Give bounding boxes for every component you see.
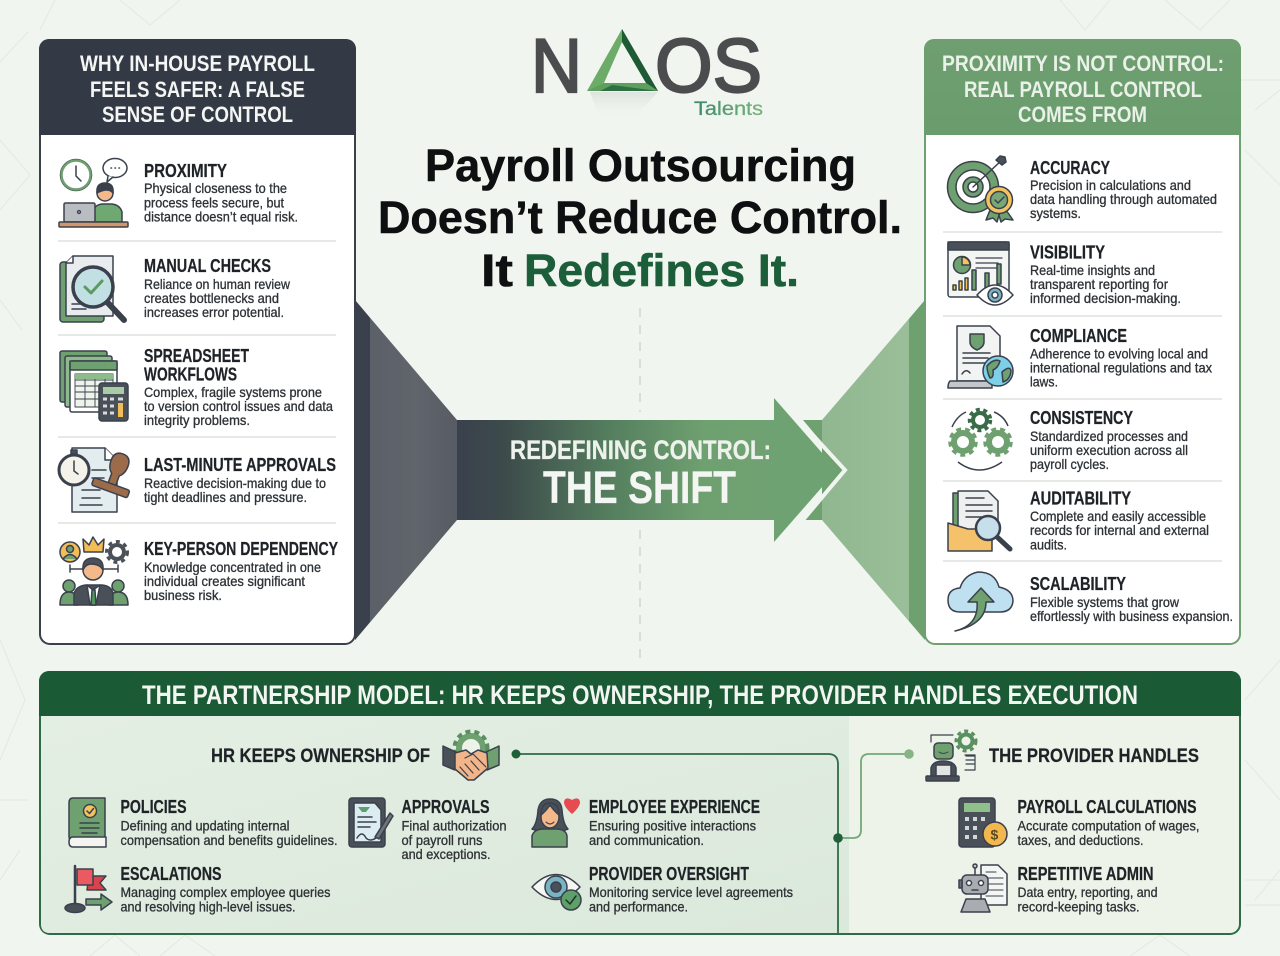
icon: logo triangle (587, 29, 658, 91)
text: proximity description (144, 180, 298, 224)
text: payroll calculations description: taxes, and deductions. (1018, 832, 1144, 848)
panel header: COMES FROM (1018, 102, 1147, 127)
title: It (481, 245, 513, 296)
text: approvals description: tight deadlines and pressure. (144, 489, 307, 505)
arrow label: REDEFINING CONTROL: (510, 435, 771, 465)
item: accuracy: ACCURACY (1030, 158, 1110, 178)
panel header: WHY IN-HOUSE PAYROLL (80, 51, 315, 76)
text: employee experience description: Ensuring positive interactions (589, 818, 756, 834)
panel: real payroll control (924, 39, 1241, 644)
text: policies description: compensation and benefits guidelines. (120, 832, 338, 848)
panel header: PROXIMITY IS NOT CONTROL: (942, 51, 1224, 76)
text: provider oversight description: Monitoring service level agreements (589, 884, 793, 900)
text: provider oversight description: and performance. (589, 898, 688, 914)
section: the provider handles: THE PROVIDER HANDLES (989, 745, 1199, 767)
text: spreadsheet description (144, 384, 333, 428)
icon: key person (60, 537, 128, 605)
heading: spreadsheet workflows (144, 346, 249, 384)
text: approvals description: of payroll runs (402, 832, 482, 848)
icon: target and badge (948, 156, 1013, 222)
panel header (39, 39, 356, 135)
text: spreadsheet description: Complex, fragile systems prone (144, 384, 322, 400)
item: auditability (948, 488, 1209, 552)
item: auditability: AUDITABILITY (1030, 488, 1131, 508)
icon: robot and document (959, 864, 1007, 912)
heading: spreadsheet workflows: WORKFLOWS (144, 364, 237, 384)
icon: magnifier over document (60, 256, 124, 322)
text: spreadsheet description: integrity problems. (144, 412, 250, 428)
text: accuracy description (1030, 177, 1217, 221)
item: accuracy (948, 156, 1217, 222)
item: scalability: SCALABILITY (1030, 574, 1126, 594)
icon: dashboard and eye (948, 242, 1013, 305)
text: compliance description: international regulations and tax (1030, 360, 1212, 376)
text: policies description: Defining and updating internal (120, 818, 290, 834)
icon: stopwatch, document and stamp (59, 447, 141, 512)
text: manual checks description: creates bottlenecks and (144, 290, 279, 306)
icon: three gears (950, 410, 1011, 470)
text: approvals description (402, 818, 506, 862)
heading: spreadsheet workflows: SPREADSHEET (144, 346, 249, 366)
icon: smiling employee with heart (532, 798, 580, 847)
text: manual checks description (144, 276, 291, 320)
text: auditability description: audits. (1030, 536, 1067, 552)
text: repetitive admin description (1018, 884, 1158, 914)
item: compliance: COMPLIANCE (1030, 326, 1127, 346)
text: escalations description: Managing complex employee queries (120, 884, 330, 900)
text: auditability description: Complete and easily accessible (1030, 508, 1206, 524)
text: key-person description: individual creates significant (144, 573, 305, 589)
item: escalations: ESCALATIONS (120, 864, 222, 884)
item: payroll calculations (959, 797, 1200, 848)
section: HR keeps ownership: HR KEEPS OWNERSHIP OF (211, 745, 430, 767)
text: accuracy description: Precision in calculations and (1030, 177, 1191, 193)
arrow label (510, 435, 771, 513)
right funnel (803, 300, 925, 640)
title: Redefines It. (524, 245, 799, 296)
icon: cloud and growth arrow (948, 572, 1013, 631)
icon: robot and gear (926, 731, 976, 781)
item: payroll calculations: PAYROLL CALCULATIONS (1018, 797, 1196, 817)
item: compliance (948, 326, 1212, 390)
item: policies (69, 797, 338, 848)
connector lines (512, 749, 914, 934)
item: consistency (950, 408, 1188, 472)
text: provider oversight description (589, 884, 793, 914)
item: policies: POLICIES (120, 797, 186, 817)
text: manual checks description: increases error potential. (144, 304, 284, 320)
item: last-minute approvals: LAST-MINUTE APPROVALS (144, 455, 336, 475)
item: manual checks (60, 256, 291, 322)
item: visibility (948, 242, 1181, 306)
item: repetitive admin: REPETITIVE ADMIN (1018, 864, 1154, 884)
title: Payroll Outsourcing (425, 140, 856, 191)
panel header: SENSE OF CONTROL (102, 102, 293, 127)
text: consistency description: uniform execution across all (1030, 442, 1188, 458)
item: employee experience (532, 797, 760, 848)
text: key-person description (144, 559, 321, 603)
text: consistency description: payroll cycles. (1030, 456, 1109, 472)
left funnel (355, 300, 457, 640)
title: Doesn’t Reduce Control. (378, 192, 902, 243)
item: escalations (65, 864, 330, 914)
dashed centre line (639, 308, 641, 660)
item: proximity: PROXIMITY (144, 161, 227, 181)
text: consistency description: Standardized processes and (1030, 428, 1188, 444)
item: approvals (349, 797, 506, 862)
text: repetitive admin description: Data entry, reporting, and (1018, 884, 1158, 900)
text: approvals description: Final authorization (402, 818, 506, 834)
chevron highlight (799, 420, 845, 520)
icon: handshake and gear (443, 732, 499, 780)
item: approvals: APPROVALS (402, 797, 490, 817)
item: repetitive admin (959, 864, 1158, 914)
icon: flag and arrow (65, 866, 112, 912)
text: employee experience description: and communication. (589, 832, 704, 848)
icon: calculator and coin (959, 798, 1007, 847)
text: compliance description (1030, 346, 1212, 390)
icon: document, shield and globe (948, 326, 1013, 388)
title (378, 140, 902, 296)
text: visibility description (1030, 262, 1181, 306)
text: accuracy description: data handling through automated (1030, 191, 1217, 207)
arrow label: THE SHIFT (543, 462, 736, 513)
text: auditability description: records for internal and external (1030, 522, 1209, 538)
text: escalations description: and resolving high-level issues. (120, 898, 296, 914)
item: employee experience: EMPLOYEE EXPERIENCE (589, 797, 760, 817)
text: escalations description (120, 884, 330, 914)
panel header (924, 39, 1241, 135)
text: auditability description (1030, 508, 1209, 552)
item: provider oversight: PROVIDER OVERSIGHT (589, 864, 749, 884)
text: visibility description: informed decision-making. (1030, 290, 1181, 306)
item: last-minute approvals (59, 447, 336, 512)
section: HR keeps ownership (211, 732, 499, 780)
panel: why in-house feels safer (39, 39, 356, 644)
text: key-person description: Knowledge concentrated in one (144, 559, 321, 575)
text: scalability description: effortlessly with business expansion. (1030, 608, 1233, 624)
item: provider oversight (532, 864, 793, 914)
panel: partnership model (39, 671, 1241, 934)
text: consistency description (1030, 428, 1188, 472)
text: payroll calculations description (1018, 818, 1200, 848)
arrow: the shift (355, 300, 925, 640)
shift arrow shape (457, 398, 837, 542)
logo: OS (655, 24, 762, 109)
text: employee experience description (589, 818, 756, 848)
item: spreadsheet workflows (60, 346, 333, 428)
item: consistency: CONSISTENCY (1030, 408, 1133, 428)
item: visibility: VISIBILITY (1030, 242, 1105, 262)
item: key-person dependency (60, 537, 338, 605)
logo (531, 24, 763, 120)
panel header (39, 671, 1241, 716)
panel header: REAL PAYROLL CONTROL (964, 77, 1202, 102)
text: approvals description (144, 475, 326, 505)
text: visibility description: transparent reporting for (1030, 276, 1168, 292)
text: spreadsheet description: to version control issues and data (144, 398, 333, 414)
icon: calculator and coin: $ (990, 826, 998, 842)
text: policies description (120, 818, 338, 848)
text: repetitive admin description: record-keeping tasks. (1018, 898, 1140, 914)
text: proximity description: Physical closeness to the (144, 180, 287, 196)
text: compliance description: laws. (1030, 374, 1058, 390)
icon: policy book (69, 798, 106, 847)
text: scalability description (1030, 594, 1233, 624)
text: scalability description: Flexible systems that grow (1030, 594, 1180, 610)
item: manual checks: MANUAL CHECKS (144, 256, 271, 276)
item: scalability (948, 572, 1233, 631)
text: approvals description: and exceptions. (402, 846, 490, 862)
icon: clock and person at laptop (59, 158, 128, 227)
text: proximity description: process feels secure, but (144, 194, 284, 210)
icon: folder and magnifier (948, 491, 1010, 551)
item: proximity (59, 158, 298, 227)
text: manual checks description: Reliance on human review (144, 276, 291, 292)
icon: spreadsheets and calculator (60, 351, 128, 421)
text: payroll calculations description: Accurate computation of wages, (1018, 818, 1200, 834)
logo: Talents (694, 99, 763, 120)
logo: N (531, 24, 582, 109)
item: key-person dependency: KEY-PERSON DEPENDENCY (144, 539, 338, 559)
icon: signed document (349, 798, 393, 847)
HR ownership background (41, 716, 849, 933)
text: approvals description: Reactive decision-making due to (144, 475, 326, 491)
panel header: FEELS SAFER: A FALSE (90, 77, 305, 102)
text: key-person description: business risk. (144, 587, 222, 603)
text: accuracy description: systems. (1030, 205, 1081, 221)
text: visibility description: Real-time insights and (1030, 262, 1155, 278)
section: the provider handles (926, 731, 1199, 781)
text: proximity description: distance doesn’t equal risk. (144, 208, 298, 224)
text: compliance description: Adherence to evolving local and (1030, 346, 1208, 362)
icon: eye and check (532, 874, 581, 910)
